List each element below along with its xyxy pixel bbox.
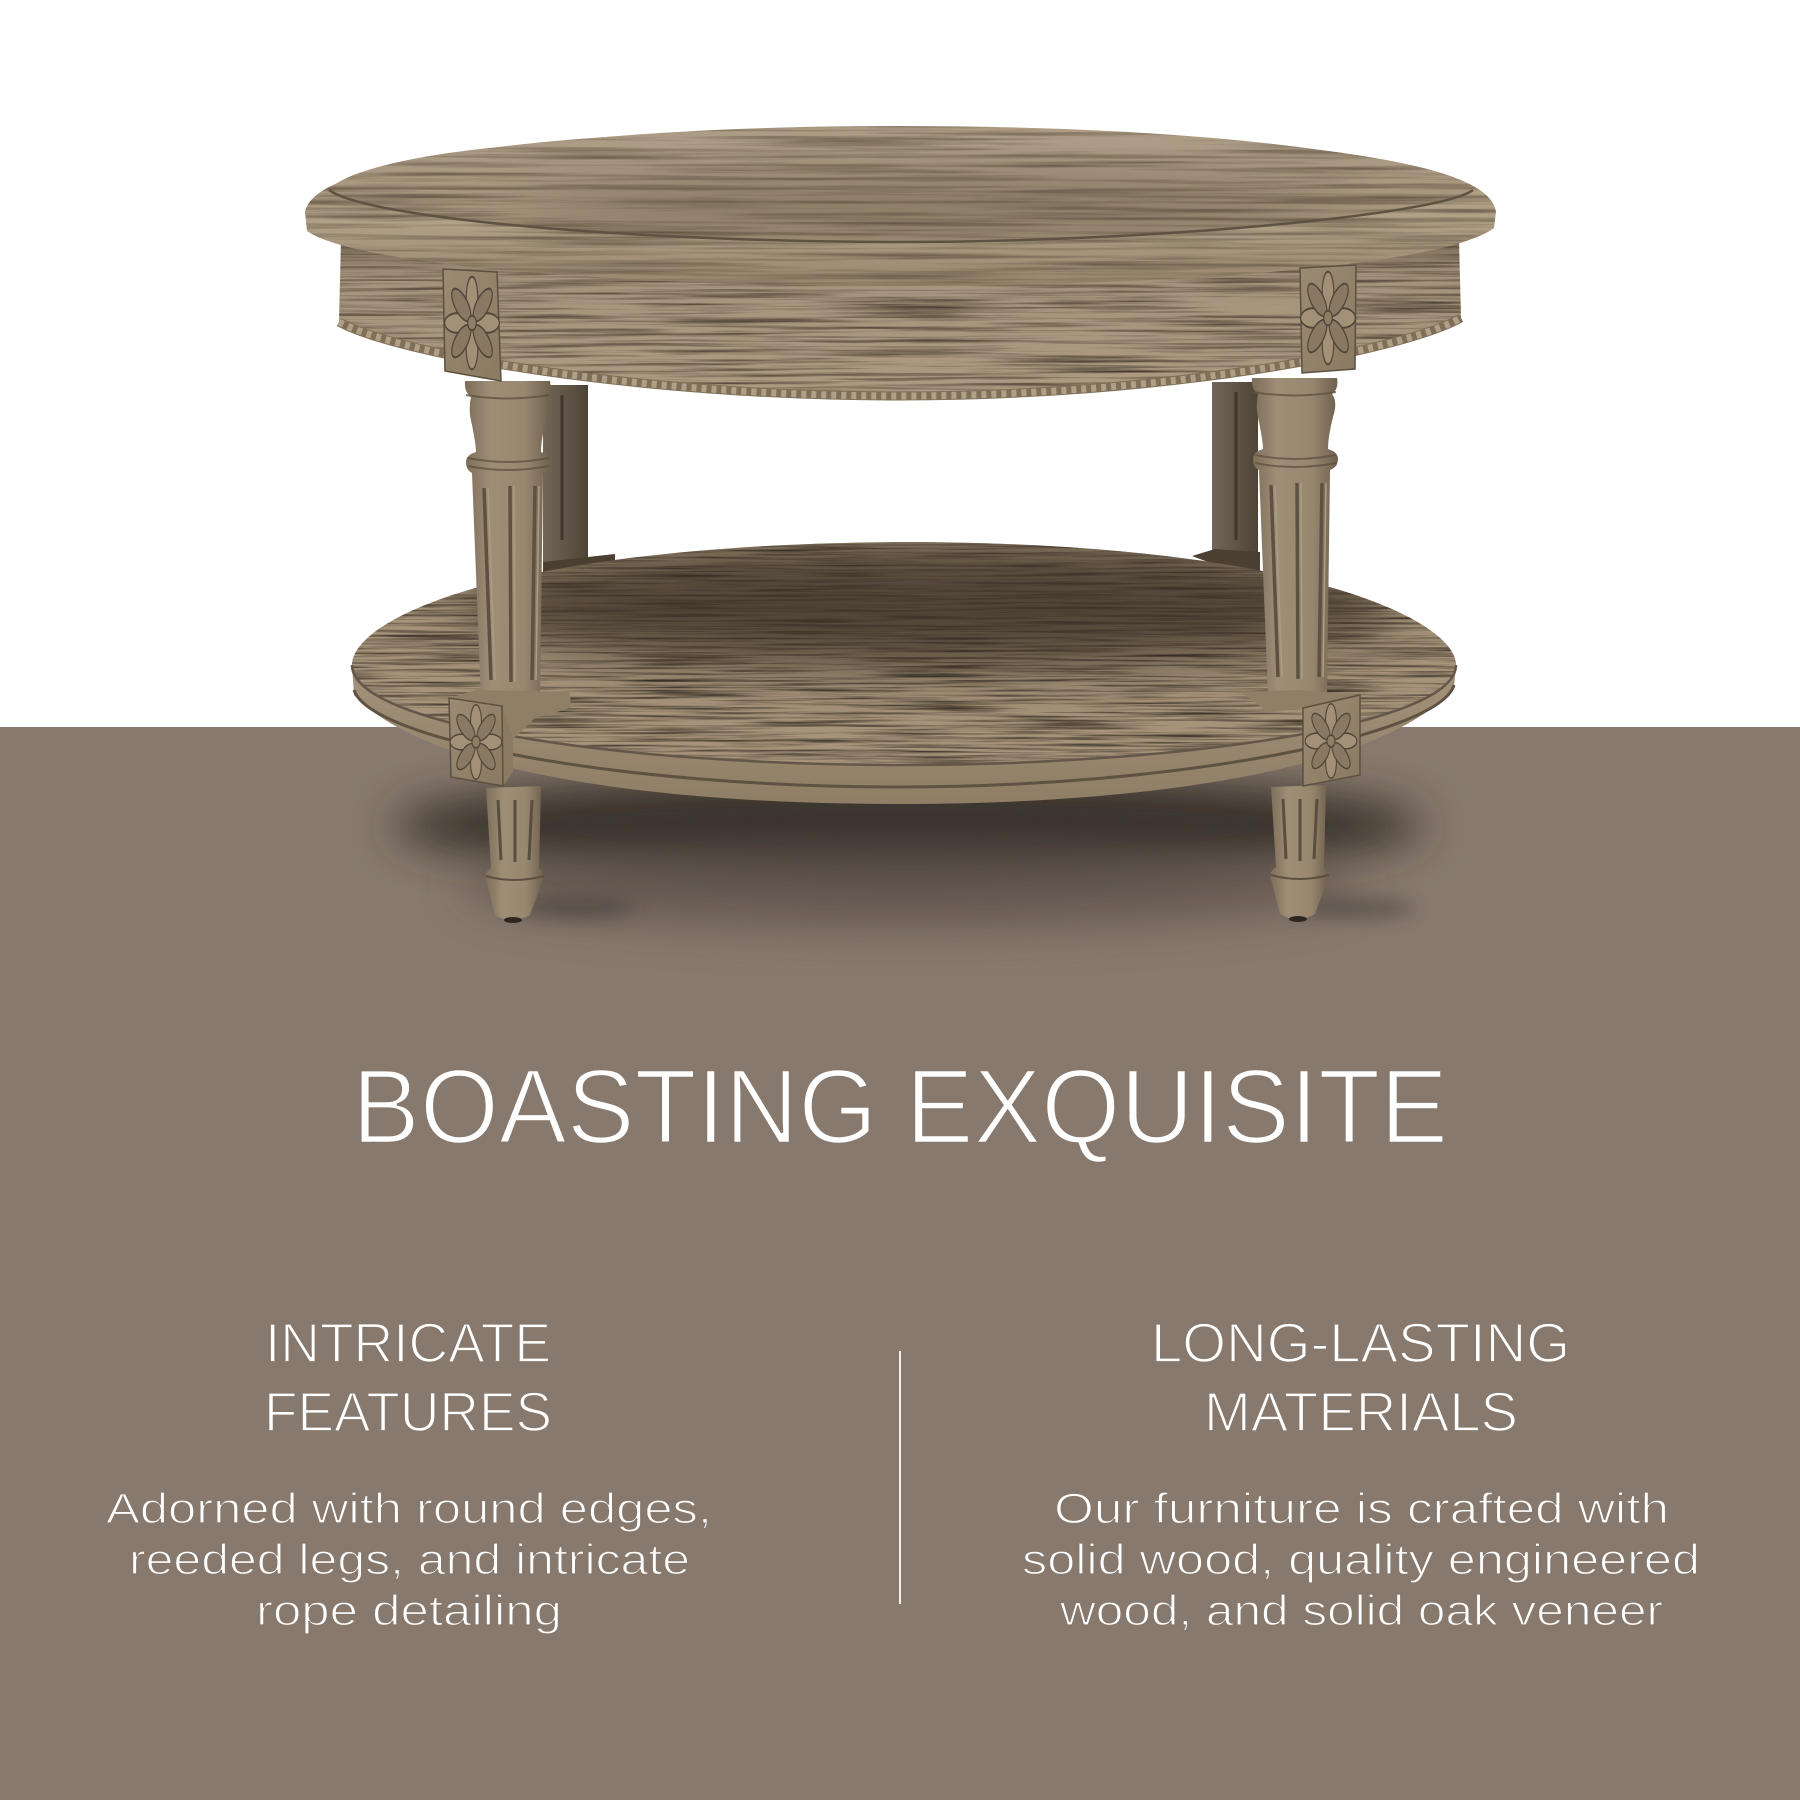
rope trim: [339, 318, 1461, 396]
right body text: [1022, 1485, 1700, 1635]
table top edge: [305, 126, 1496, 286]
taupe lower panel: [0, 727, 1800, 1800]
lower shelf top surface: [352, 542, 1456, 765]
left subheading: INTRICATE: [265, 1311, 551, 1374]
table top surface: [329, 129, 1473, 242]
lower shelf: [352, 542, 1456, 804]
right body text: Our furniture is crafted with: [1054, 1485, 1669, 1533]
lower left block: [449, 690, 571, 786]
table product illustration: [305, 126, 1496, 929]
back right leg: [1192, 382, 1260, 574]
left body text: Adorned with round edges,: [106, 1485, 712, 1533]
upper left block: [443, 269, 501, 381]
lower shelf rim: [352, 665, 1456, 804]
left body text: rope detailing: [256, 1587, 562, 1635]
right body text: solid wood, quality engineered: [1022, 1536, 1700, 1584]
white upper background: [0, 0, 1800, 727]
top surface rim line: [329, 190, 1473, 242]
right subheading: LONG-LASTING: [1151, 1311, 1570, 1374]
left subheading: FEATURES: [264, 1380, 552, 1443]
back left leg: [543, 385, 615, 580]
front legs: [465, 378, 1338, 700]
right body text: wood, and solid oak veneer: [1059, 1587, 1663, 1635]
left column: intricate features: [106, 1311, 712, 1635]
center divider: [899, 1351, 901, 1604]
left body text: [106, 1485, 712, 1635]
lower legs: [486, 785, 1329, 923]
right subheading: MATERIALS: [1204, 1380, 1518, 1443]
left subheading: [264, 1311, 552, 1443]
main heading: BOASTING EXQUISITE: [352, 1048, 1448, 1166]
right subheading: [1151, 1311, 1570, 1443]
left body text: reeded legs, and intricate: [129, 1536, 690, 1584]
upper right block: [1300, 265, 1356, 373]
lower right block: [1240, 690, 1360, 786]
floor shadow: [393, 773, 1423, 929]
right column: long-lasting materials: [1022, 1311, 1700, 1635]
apron: [339, 240, 1461, 396]
